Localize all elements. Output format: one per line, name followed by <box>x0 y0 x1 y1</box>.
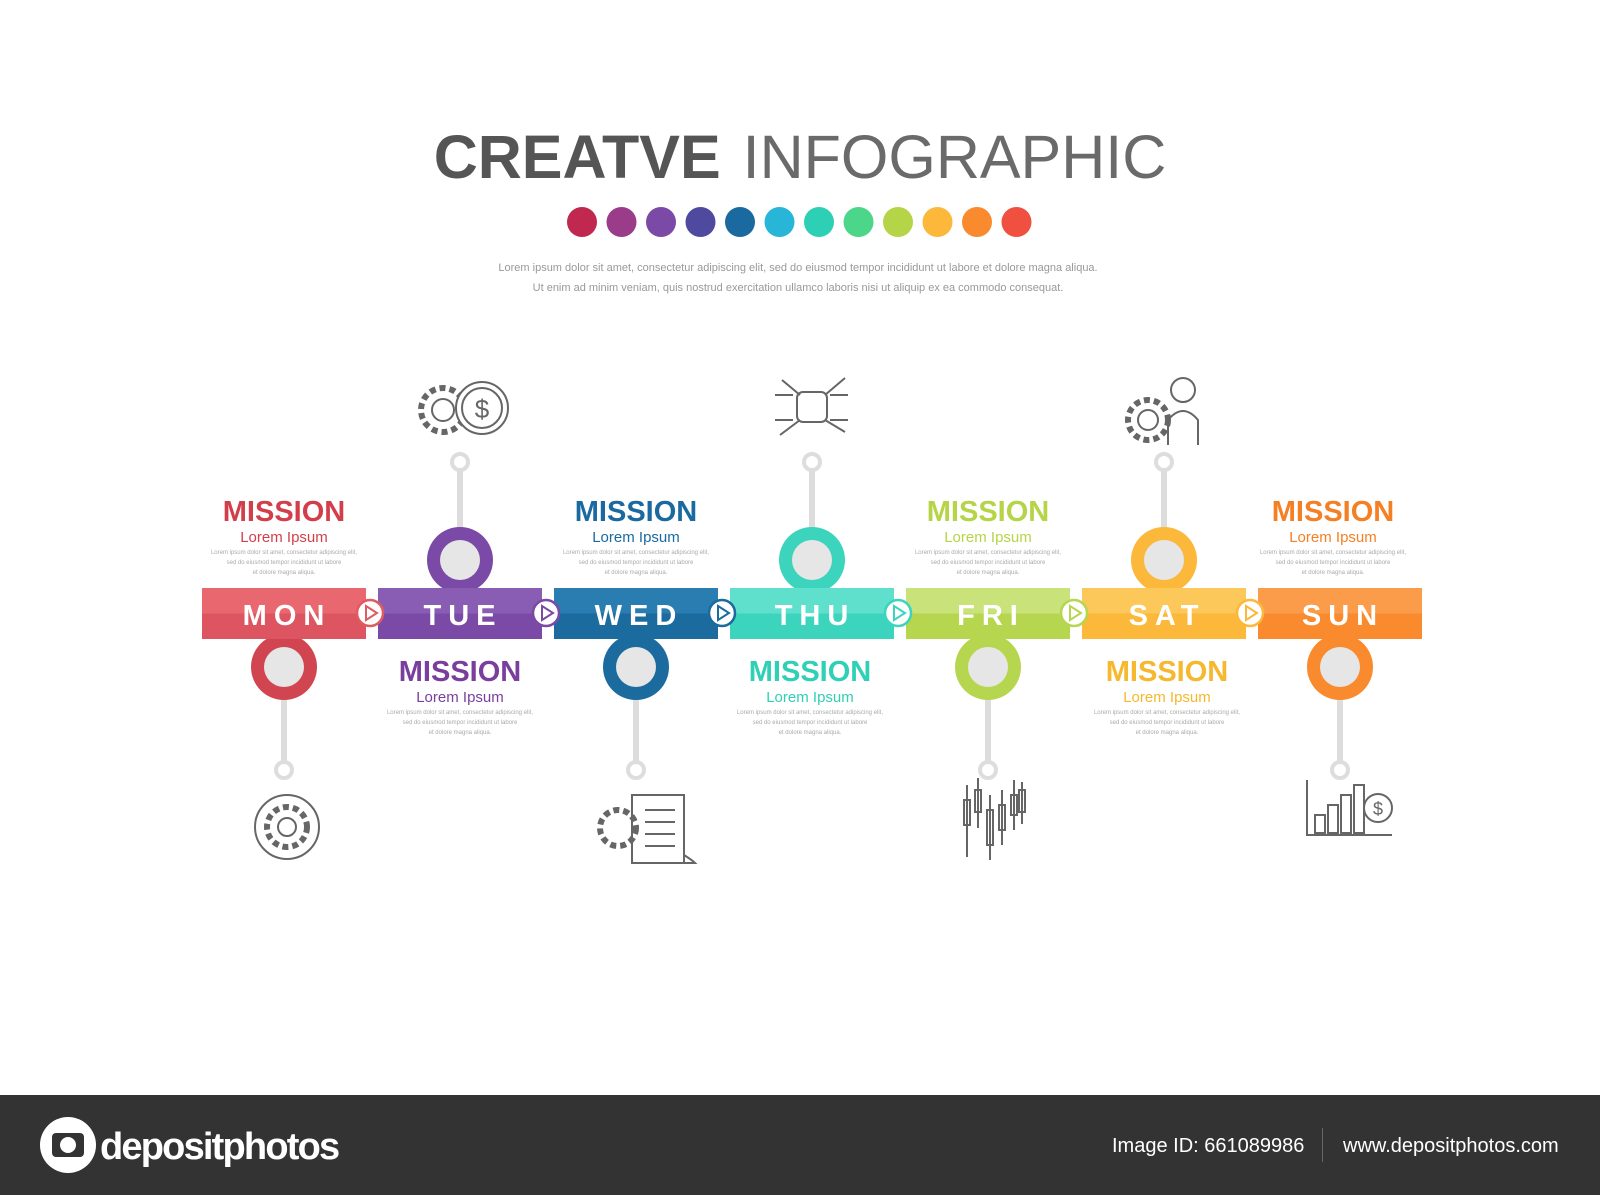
stems and connector circles <box>251 454 1373 778</box>
day bars: TUE <box>424 600 502 632</box>
mission texts below: Lorem ipsum dolor sit amet, consectetur adipiscing elit, <box>1094 710 1240 716</box>
icon: candlesticks (FRI) <box>964 778 1025 860</box>
play arrows <box>357 600 1263 626</box>
icon: gear and person (SAT) <box>1128 378 1198 445</box>
mission texts below <box>387 656 1240 736</box>
logo <box>40 1117 339 1173</box>
mission texts above: sed do eiusmod tempor incididunt ut labore <box>931 560 1046 566</box>
mission texts above: et dolore magna aliqua. <box>957 570 1020 576</box>
mission texts above: Lorem Ipsum <box>1289 529 1377 546</box>
mission texts below: MISSION <box>399 656 521 688</box>
footer bar: www.depositphotos.com <box>1342 1135 1559 1157</box>
mission texts above: sed do eiusmod tempor incididunt ut labore <box>579 560 694 566</box>
mission texts below: Lorem Ipsum <box>1123 689 1211 706</box>
icon: gear and checklist (WED) <box>600 795 695 863</box>
mission texts above: Lorem Ipsum <box>592 529 680 546</box>
mission texts above: MISSION <box>575 496 697 528</box>
icons <box>255 378 1392 863</box>
footer bar <box>0 1095 1600 1195</box>
mission texts below: sed do eiusmod tempor incididunt ut labore <box>403 720 518 726</box>
mission texts below: sed do eiusmod tempor incididunt ut labore <box>753 720 868 726</box>
icon: bar chart with dollar (SUN): $ <box>1373 799 1383 819</box>
day bars: SUN <box>1302 600 1384 632</box>
icon: gear and coin (TUE) <box>421 382 508 434</box>
day bars: WED <box>595 600 683 632</box>
mission texts above: MISSION <box>223 496 345 528</box>
day bars: FRI <box>957 600 1025 632</box>
day bars: SAT <box>1129 600 1205 632</box>
mission texts above: Lorem ipsum dolor sit amet, consectetur adipiscing elit, <box>211 550 357 556</box>
mission texts below: et dolore magna aliqua. <box>1136 730 1199 736</box>
color dots <box>567 207 1032 237</box>
mission texts above: sed do eiusmod tempor incididunt ut labore <box>1276 560 1391 566</box>
mission texts above: Lorem ipsum dolor sit amet, consectetur adipiscing elit, <box>915 550 1061 556</box>
mission texts below: Lorem ipsum dolor sit amet, consectetur adipiscing elit, <box>737 710 883 716</box>
mission texts below: sed do eiusmod tempor incididunt ut labore <box>1110 720 1225 726</box>
day bars <box>202 588 1422 639</box>
mission texts above <box>211 496 1406 576</box>
title: CREATVE INFOGRAPHIC <box>434 123 1166 191</box>
mission texts above: MISSION <box>1272 496 1394 528</box>
mission texts above: et dolore magna aliqua. <box>253 570 316 576</box>
icon: gear and coin (TUE): $ <box>475 394 490 424</box>
logo: depositphotos <box>100 1126 339 1168</box>
mission texts above: Lorem ipsum dolor sit amet, consectetur adipiscing elit, <box>1260 550 1406 556</box>
description: Ut enim ad minim veniam, quis nostrud exercitation ullamco laboris nisi ut aliquip ex ea commodo consequat. <box>533 282 1063 294</box>
mission texts below: et dolore magna aliqua. <box>429 730 492 736</box>
mission texts below: et dolore magna aliqua. <box>779 730 842 736</box>
mission texts below: MISSION <box>1106 656 1228 688</box>
mission texts below: Lorem Ipsum <box>766 689 854 706</box>
mission texts below: Lorem Ipsum <box>416 689 504 706</box>
mission texts below: Lorem ipsum dolor sit amet, consectetur adipiscing elit, <box>387 710 533 716</box>
image id: Image ID: 661089986 <box>1112 1135 1304 1157</box>
mission texts above: et dolore magna aliqua. <box>605 570 668 576</box>
mission texts above: Lorem Ipsum <box>944 529 1032 546</box>
mission texts above: sed do eiusmod tempor incididunt ut labore <box>227 560 342 566</box>
description <box>498 262 1098 294</box>
day bars: THU <box>775 600 855 632</box>
icon: bar chart with dollar (SUN) <box>1307 780 1392 835</box>
day bars: MON <box>243 600 331 632</box>
mission texts above: et dolore magna aliqua. <box>1302 570 1365 576</box>
icon: hands (THU) <box>775 378 848 435</box>
description: Lorem ipsum dolor sit amet, consectetur adipiscing elit, sed do eiusmod tempor incididunt ut labore et dolore magna aliqua. <box>498 262 1098 274</box>
mission texts above: Lorem ipsum dolor sit amet, consectetur adipiscing elit, <box>563 550 709 556</box>
icon: gear cycle (MON) <box>255 795 319 859</box>
mission texts below: MISSION <box>749 656 871 688</box>
mission texts above: MISSION <box>927 496 1049 528</box>
mission texts above: Lorem Ipsum <box>240 529 328 546</box>
